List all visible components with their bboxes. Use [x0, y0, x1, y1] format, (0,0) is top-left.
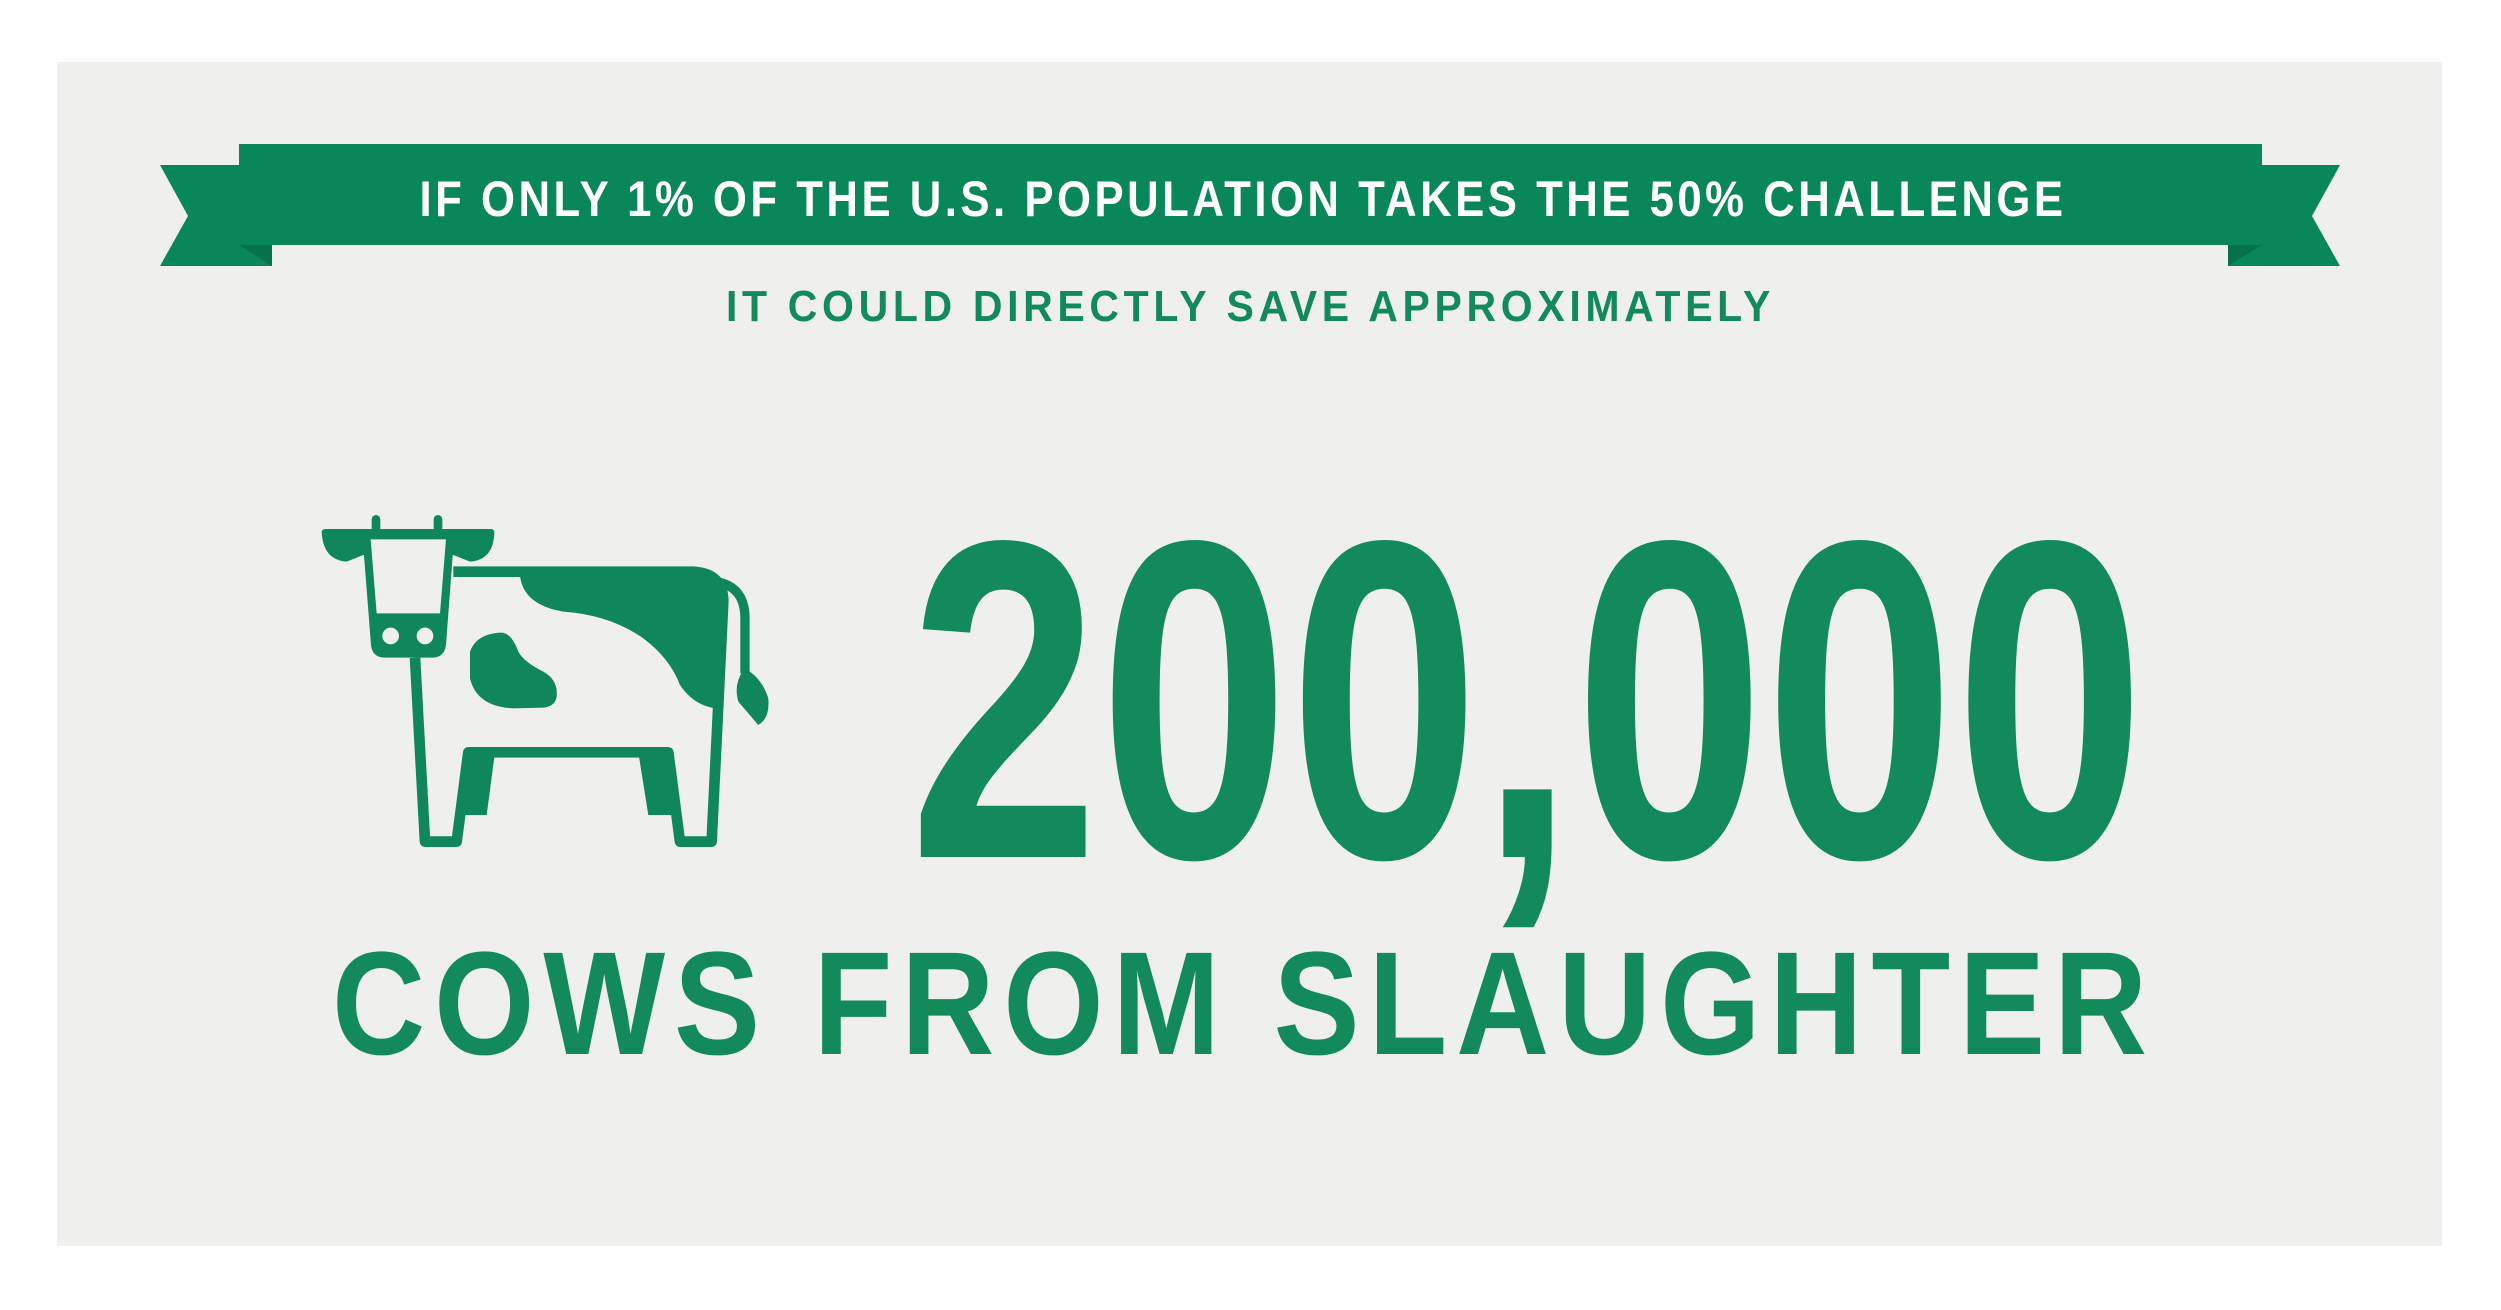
banner ribbon — [160, 144, 2340, 266]
big number: 200,000 — [909, 447, 2145, 954]
banner text: IF ONLY 1% OF THE U.S. POPULATION TAKES THE 50% CHALLENGE — [420, 171, 2066, 227]
icon: cow — [322, 515, 768, 842]
caption: cows from slaughter: COWS FROM SLAUGHTER — [332, 922, 2156, 1086]
subtitle: IT COULD DIRECTLY SAVE APPROXIMATELY — [726, 282, 1775, 331]
